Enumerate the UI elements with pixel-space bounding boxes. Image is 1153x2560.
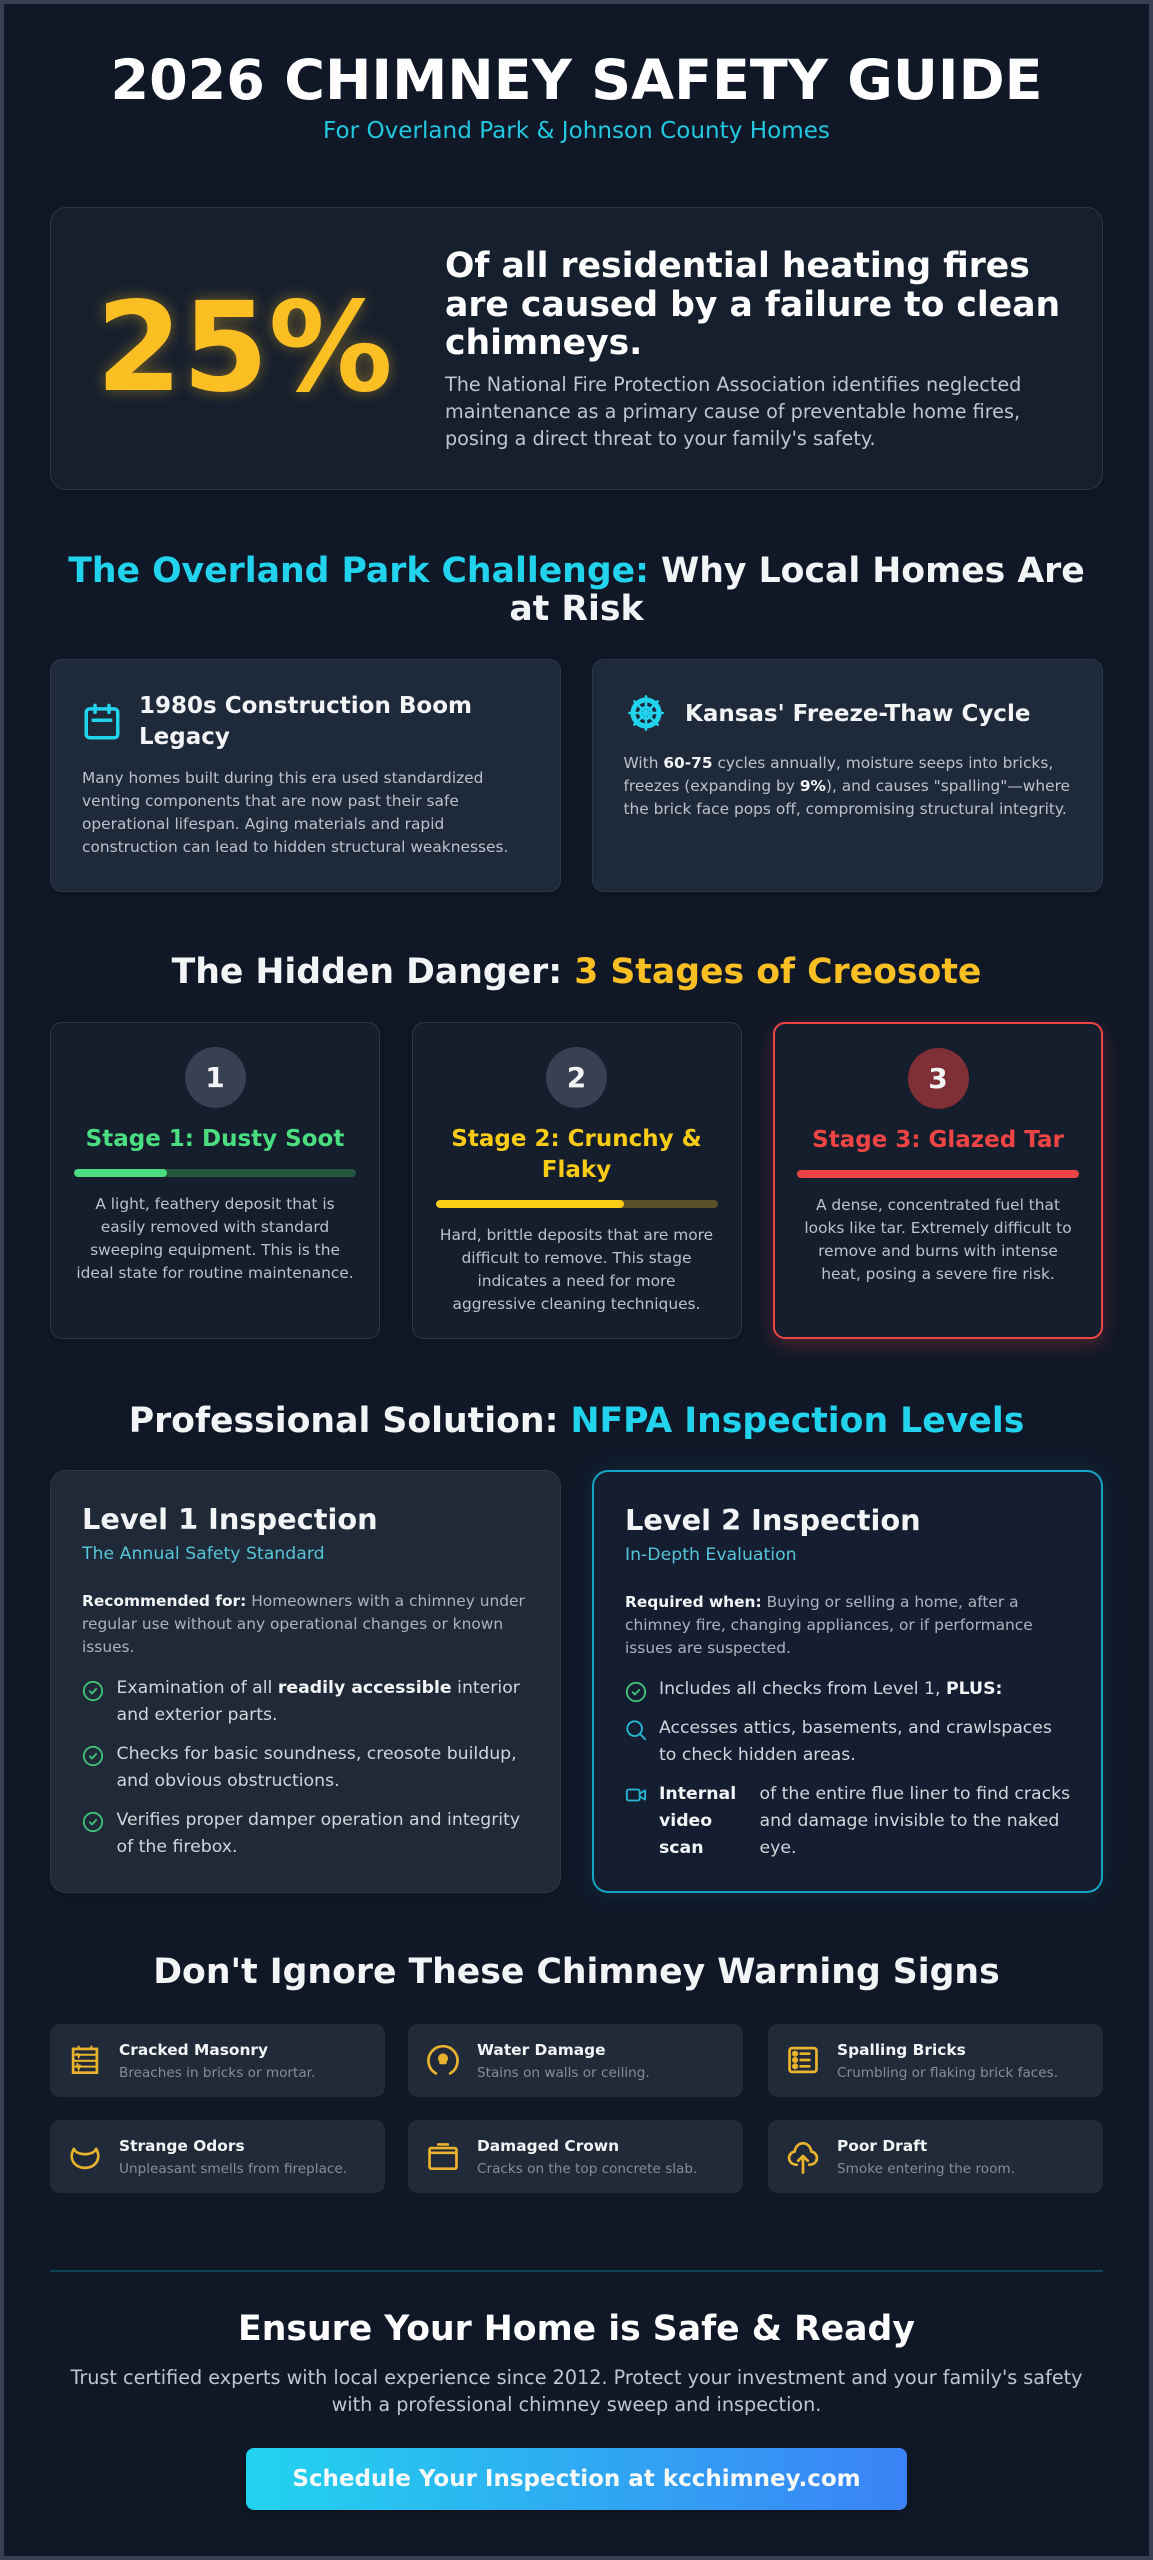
stage title: Stage 2: Crunchy & (451, 1126, 702, 1152)
subtitle: For Overland Park & Johnson County Homes (323, 118, 830, 144)
recommendation: issues. (82, 1638, 134, 1656)
stage number: 1 (205, 1060, 225, 1094)
call-to-action text: with a professional chimney sweep and inspection. (332, 2393, 821, 2416)
list item: and obvious obstructions. (116, 1771, 340, 1791)
severity bar (436, 1200, 718, 1208)
card heading: Legacy (139, 724, 230, 750)
list item: video scan label: Internal (659, 1784, 736, 1804)
sign title: Damaged Crown (477, 2136, 619, 2154)
card text: Many homes built during this era used standardized (82, 769, 483, 787)
stage text (804, 1196, 1072, 1283)
sign title: Water Damage (477, 2040, 606, 2058)
stage text: indicates a need for more (478, 1272, 675, 1290)
sign title: Spalling Bricks (837, 2040, 966, 2058)
icon: check (82, 1746, 104, 1766)
stat description: posing a direct threat to your family's safety. (445, 426, 876, 450)
list item (116, 1810, 520, 1857)
list item (116, 1744, 517, 1791)
stage title (451, 1126, 702, 1183)
level subtitle: In-Depth Evaluation (625, 1545, 797, 1565)
level title: Level 2 Inspection (625, 1503, 921, 1537)
card heading (139, 693, 472, 750)
panel: level 1 inspection (50, 1470, 561, 1893)
stage text: remove and burns with intense (818, 1242, 1058, 1260)
panel: freeze-thaw cycle (592, 659, 1103, 892)
sign text: Breaches in bricks or mortar. (119, 2064, 315, 2080)
heading: Overland Park challenge: at Risk (509, 589, 644, 629)
sign text: Stains on walls or ceiling. (477, 2064, 650, 2080)
stage number (546, 1046, 607, 1108)
requirement: chimney fire, changing appliances, or if performance (625, 1616, 1033, 1634)
list item: video scan text: of the entire flue liner to find cracks (760, 1784, 1070, 1804)
list item: video scan label (659, 1784, 736, 1858)
sign title: Strange Odors (119, 2136, 245, 2154)
stage number: 3 (928, 1062, 948, 1094)
button: schedule inspection: Schedule Your Inspection at kcchimney.com (292, 2466, 861, 2492)
icon: strange odors (70, 2148, 100, 2170)
panel: stage 2 (412, 1022, 742, 1339)
list item (659, 1718, 1052, 1765)
list item: video scan label: video (659, 1811, 712, 1831)
card text: operational lifespan. Aging materials and rapid (82, 815, 444, 833)
panel: stage 3 (773, 1022, 1103, 1339)
call-to-action heading: Ensure Your Home is Safe & Ready (238, 2309, 915, 2349)
requirement: issues are suspected. (625, 1639, 791, 1657)
button: schedule inspection (246, 2448, 907, 2510)
stat headline: are caused by a failure to clean (445, 285, 1060, 325)
stage text: difficult to remove. This stage (462, 1249, 691, 1267)
card text (624, 754, 1070, 818)
stat headline: chimneys. (445, 323, 642, 363)
card text: With 60-75 cycles annually, moisture seeps into bricks, (624, 754, 1053, 772)
icon: calendar (84, 704, 120, 740)
list item: Examination of all readily accessible interior (116, 1678, 520, 1698)
stage number (184, 1046, 246, 1108)
panel: water damage (408, 2024, 743, 2097)
card text: construction can lead to hidden structural weaknesses. (82, 838, 508, 856)
title: 2026 CHIMNEY SAFETY GUIDE (110, 48, 1043, 113)
stage text: easily removed with standard (101, 1218, 329, 1236)
heading: creosote stages: The Hidden Danger: 3 Stages of Creosote (172, 952, 981, 992)
stat description: maintenance as a primary cause of preventable home fires, (445, 400, 1020, 422)
sign text: Unpleasant smells from fireplace. (119, 2160, 347, 2176)
icon: check (82, 1680, 104, 1702)
stage title: Flaky (542, 1157, 611, 1183)
icon: cracked masonry (72, 2046, 98, 2074)
stage number: 2 (567, 1060, 586, 1094)
panel: stage 1 (50, 1022, 380, 1339)
heading: Overland Park challenge (68, 551, 1085, 629)
panel: damaged crown (408, 2120, 743, 2193)
recommendation: Recommended for: Homeowners with a chimney under (82, 1592, 525, 1610)
severity bar (797, 1170, 1079, 1178)
panel: strange odors (50, 2120, 385, 2193)
list item (116, 1678, 520, 1724)
list item: video scan label: scan (659, 1838, 704, 1858)
sign text: Smoke entering the room. (837, 2160, 1015, 2176)
list item: video scan text: eye. (760, 1838, 796, 1858)
stage text: Hard, brittle deposits that are more (440, 1226, 713, 1244)
panel: level 2 inspection (592, 1470, 1103, 1893)
stage text: A light, feathery deposit that is (95, 1195, 335, 1213)
stage text: heat, posing a severe fire risk. (821, 1265, 1055, 1283)
stage text: looks like tar. Extremely difficult to (804, 1219, 1072, 1237)
recommendation (82, 1592, 525, 1656)
stage text: aggressive cleaning techniques. (453, 1295, 700, 1313)
stat description (444, 372, 1021, 450)
stage title: Stage 1: Dusty Soot (86, 1126, 344, 1152)
panel: spalling bricks (768, 2024, 1103, 2097)
icon: check (626, 1682, 646, 1702)
list item: Checks for basic soundness, creosote buildup, (116, 1744, 517, 1764)
sign title: Poor Draft (837, 2136, 927, 2154)
card text (82, 769, 508, 856)
list item: Accesses attics, basements, and crawlspaces (659, 1718, 1052, 1738)
icon: spalling bricks (788, 2046, 818, 2074)
card text: the brick face pops off, compromising structural integrity. (624, 800, 1067, 818)
stage text: ideal state for routine maintenance. (76, 1264, 354, 1282)
card text: freezes (expanding by 9%), and causes "spalling"—where (624, 777, 1070, 795)
list item: video scan text: and damage invisible to the naked (760, 1811, 1059, 1831)
list item: Verifies proper damper operation and integrity (116, 1810, 520, 1830)
icon: check (82, 1812, 104, 1832)
card heading: 1980s Construction Boom (139, 693, 472, 719)
requirement (625, 1593, 1033, 1657)
panel: hero statistic (50, 207, 1103, 490)
icon: damaged crown (428, 2143, 458, 2170)
heading: inspection levels: Professional Solution: NFPA Inspection Levels (129, 1401, 1024, 1441)
list item: Includes all checks from Level 1, PLUS: (659, 1678, 1002, 1698)
icon: freeze wheel (628, 695, 664, 731)
stat headline (445, 246, 1060, 363)
heading: warning signs: Don't Ignore These Chimney Warning Signs (153, 1952, 1000, 1992)
card text: venting components that are now past their safe (82, 792, 459, 810)
stage number (908, 1048, 968, 1108)
sign text: Cracks on the top concrete slab. (477, 2160, 697, 2176)
severity bar (74, 1169, 356, 1177)
call-to-action text (70, 2366, 1083, 2416)
icon: water damage (427, 2044, 459, 2075)
level subtitle: The Annual Safety Standard (82, 1544, 325, 1564)
list item: video scan text (760, 1784, 1070, 1858)
panel: 1980s construction boom (50, 659, 561, 892)
icon: video camera (626, 1788, 646, 1802)
recommendation: regular use without any operational changes or known (82, 1615, 503, 1633)
stage text (76, 1195, 354, 1282)
panel: cracked masonry (50, 2024, 385, 2097)
panel: poor draft (768, 2120, 1103, 2193)
stat description: The National Fire Protection Association identifies neglected (445, 372, 1021, 396)
icon: poor draft (788, 2142, 818, 2174)
list item: to check hidden areas. (659, 1745, 856, 1765)
big stat: 25%: 25% (96, 276, 393, 420)
list item: and exterior parts. (116, 1704, 277, 1724)
stage text (440, 1226, 713, 1313)
stage title: Stage 3: Glazed Tar (812, 1126, 1064, 1152)
list item: of the firebox. (116, 1837, 237, 1857)
card heading: Kansas' Freeze-Thaw Cycle (685, 701, 1030, 727)
call-to-action text: Trust certified experts with local experience since 2012. Protect your investment and your family's safety (70, 2366, 1083, 2389)
sign title: Cracked Masonry (119, 2040, 268, 2058)
requirement: Required when: Buying or selling a home, after a (625, 1593, 1019, 1611)
stage text: sweeping equipment. This is the (90, 1241, 340, 1259)
heading: Overland Park challenge: The Overland Park Challenge: Why Local Homes Are (68, 551, 1085, 591)
stage text: A dense, concentrated fuel that (816, 1196, 1060, 1214)
level title: Level 1 Inspection (82, 1502, 378, 1536)
stat headline: Of all residential heating fires (445, 246, 1030, 286)
icon: search (626, 1720, 646, 1740)
sign text: Crumbling or flaking brick faces. (837, 2064, 1058, 2080)
